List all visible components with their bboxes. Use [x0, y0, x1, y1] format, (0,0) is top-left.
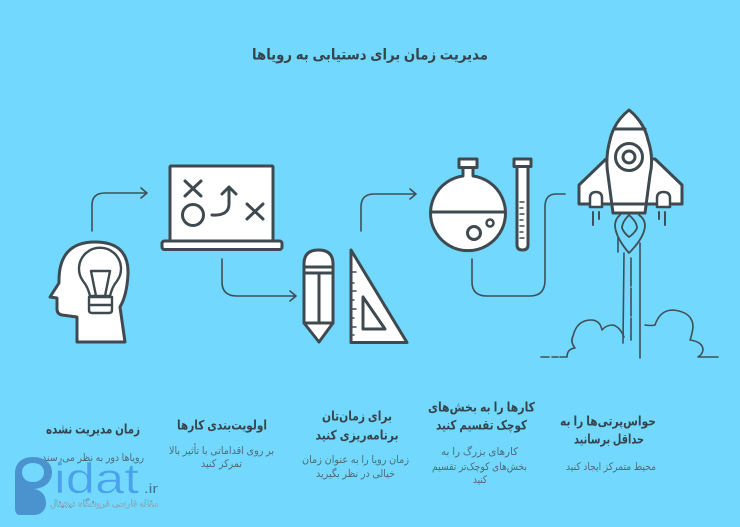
arrow: board to pencil [222, 259, 296, 301]
logo mark [15, 457, 52, 515]
arrow: head to board [92, 188, 147, 231]
heading: برنامه‌ریزی کنید [316, 428, 398, 442]
watermark logo [15, 455, 159, 515]
description: تمرکز کنید [201, 458, 242, 470]
description: کارهای بزرگ را به [441, 444, 518, 458]
description: کنید [473, 474, 487, 486]
heading: حواس‌پرتی‌ها را به [560, 414, 656, 428]
step 3 text [302, 408, 409, 480]
icon: test tube [514, 159, 531, 250]
description [302, 454, 409, 480]
step 5 text [560, 414, 656, 473]
step 1 text [42, 422, 144, 464]
icon: strategy board [162, 166, 282, 250]
icon: set square [351, 250, 407, 342]
heading: اولویت‌بندی کارها [177, 418, 267, 432]
heading [428, 400, 535, 432]
heading: کارها را به بخش‌های [428, 400, 535, 414]
icon: rocket [579, 110, 682, 358]
heading [316, 408, 398, 442]
heading: زمان مدیریت نشده [46, 422, 140, 436]
description: بر روی اقداماتی با تأثیر بالا [169, 443, 274, 457]
exhaust ticks [593, 212, 665, 225]
fins [579, 159, 682, 204]
description: بخش‌های کوچک‌تر تقسیم [432, 461, 527, 473]
icon: pencil [304, 250, 333, 342]
trails [618, 238, 640, 358]
logo tagline: مقاله فارسی فروشگاه دیجیتال [50, 498, 158, 510]
description: خیالی در نظر بگیرید [316, 467, 395, 480]
step 2 text [169, 418, 274, 470]
heading [560, 414, 656, 446]
icon: round flask [430, 159, 506, 251]
logo wordmark: idat [54, 455, 139, 503]
heading: حداقل برسانید [574, 432, 644, 446]
arrow: square to flask [361, 189, 416, 231]
logo suffix: .ir [144, 481, 159, 496]
step 4 text [428, 400, 535, 486]
heading: کوچک تقسیم کنید [436, 418, 527, 432]
description [169, 443, 274, 470]
icon: head with light bulb [50, 242, 128, 342]
body [607, 110, 652, 213]
window [616, 144, 642, 170]
heading: برای زمان‌تان [322, 408, 392, 424]
description: محیط متمرکز ایجاد کنید [566, 461, 656, 473]
arrow: flask to rocket [472, 194, 565, 296]
clouds [541, 310, 718, 357]
flame [615, 215, 645, 253]
nozzles [590, 192, 670, 207]
description: رویاها دور به نظر می‌رسند [42, 452, 144, 464]
title: مدیریت زمان برای دستیابی به رویاها [252, 46, 488, 64]
description: زمان رویا را به عنوان زمان [302, 454, 409, 466]
description [432, 444, 527, 486]
